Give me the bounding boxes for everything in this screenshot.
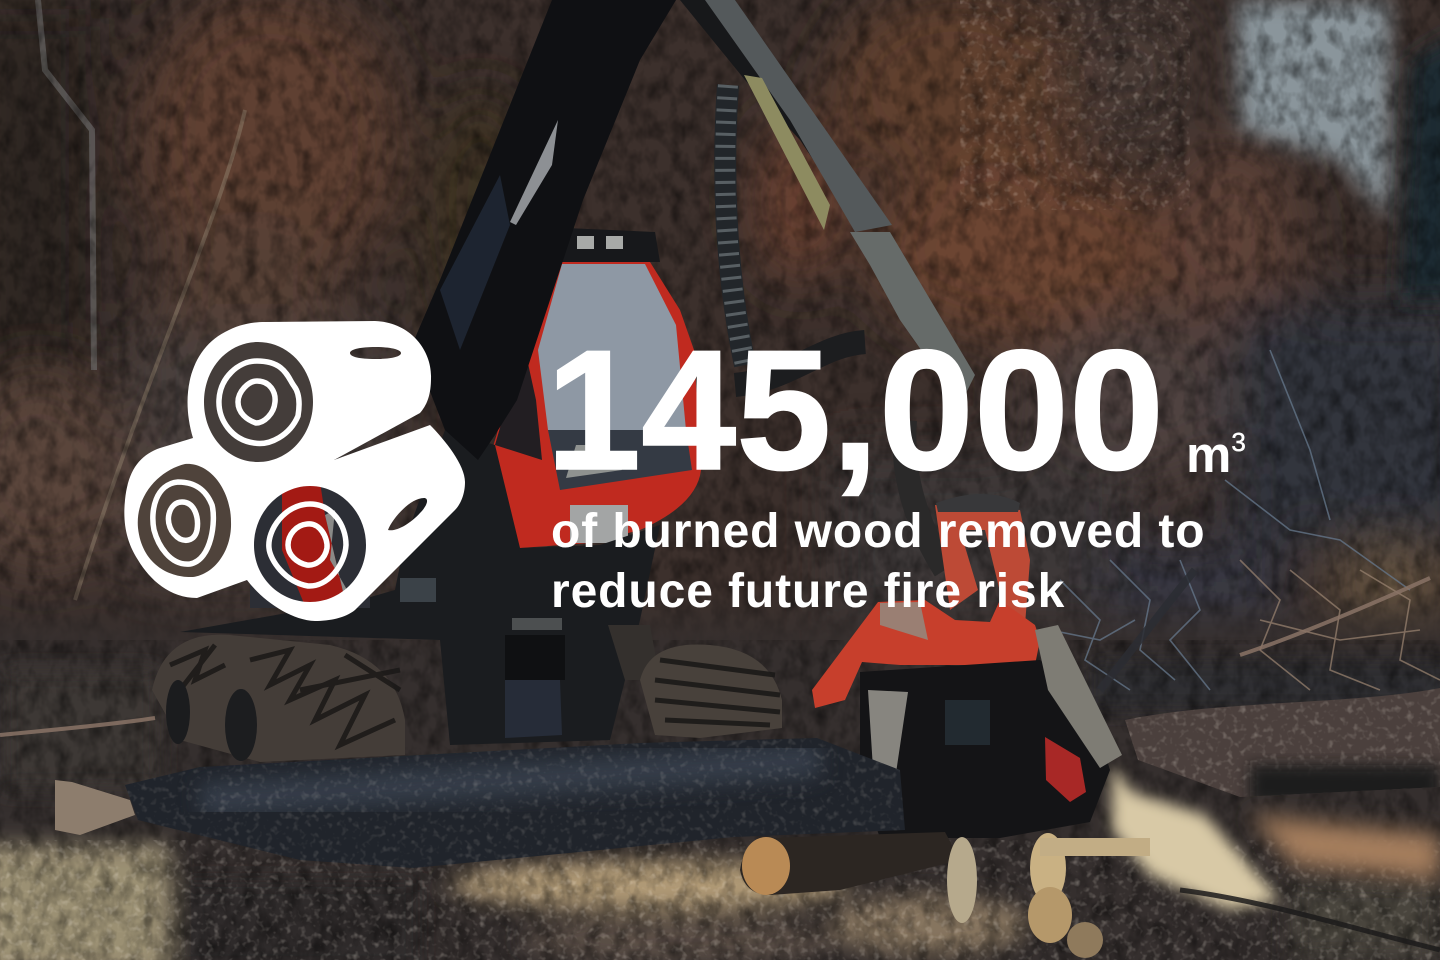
cab shell xyxy=(492,262,701,548)
number plate xyxy=(570,505,628,543)
description text: reduce future fire risk xyxy=(551,565,1065,618)
boom arm: rear black section and grey top xyxy=(680,0,862,230)
chassis xyxy=(180,430,660,745)
description text xyxy=(551,505,1206,618)
boom arm: black xyxy=(412,0,676,460)
bare twigs xyxy=(1050,350,1440,690)
hose coil xyxy=(725,85,945,570)
headline number: 145,000 xyxy=(546,315,1164,506)
left log rings xyxy=(153,482,213,564)
harvester machine xyxy=(152,0,1122,838)
description text: of burned wood removed to xyxy=(551,505,1206,558)
cab side window xyxy=(495,345,542,460)
cab window xyxy=(538,264,686,430)
center log rings xyxy=(269,504,346,586)
top log rings xyxy=(219,361,299,443)
lower boom section xyxy=(850,232,975,405)
forest floor xyxy=(0,590,1440,960)
cut log sections xyxy=(740,832,1150,958)
sawdust spray xyxy=(1112,765,1440,910)
sky gap xyxy=(1235,0,1390,220)
felling head: red housing xyxy=(812,600,1040,708)
cab roof rack xyxy=(560,228,660,262)
right-hand felled log xyxy=(1125,688,1440,797)
pale bark trunks xyxy=(38,0,245,600)
felling head: body xyxy=(860,660,1110,838)
branches xyxy=(0,570,1440,950)
unit label: m3 xyxy=(1186,426,1246,483)
dappled light through trees xyxy=(960,0,1190,210)
log stump end xyxy=(55,780,135,835)
felled black log xyxy=(125,738,905,868)
rear tyres xyxy=(152,635,405,762)
front tyres xyxy=(608,625,782,738)
grapple arms xyxy=(935,505,1030,650)
